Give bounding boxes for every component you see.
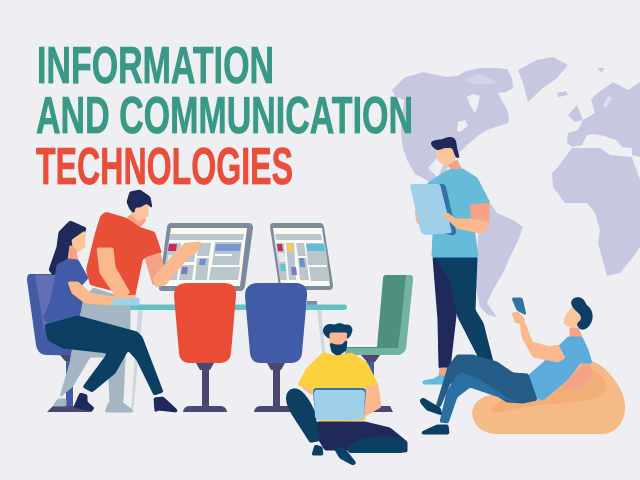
upper arm xyxy=(145,253,167,285)
face xyxy=(131,203,148,221)
front leg xyxy=(440,373,517,423)
face xyxy=(72,231,85,252)
left arm xyxy=(97,248,130,298)
reclining man on bean bag xyxy=(420,297,625,434)
heel left xyxy=(74,393,94,411)
man in red xyxy=(53,190,201,412)
hair xyxy=(49,221,86,275)
arms xyxy=(363,385,381,417)
monitor right xyxy=(270,223,333,290)
table leg right xyxy=(317,310,326,360)
arctic islet xyxy=(597,68,604,73)
table top xyxy=(113,304,347,310)
table xyxy=(113,301,347,412)
left trouser leg xyxy=(433,257,457,368)
eurasia xyxy=(567,82,640,157)
green chair xyxy=(345,275,413,412)
shoes xyxy=(420,398,442,415)
shoe xyxy=(423,375,446,384)
shirt xyxy=(86,212,162,297)
trousers xyxy=(60,288,130,402)
greenland xyxy=(518,57,568,102)
standing man xyxy=(410,137,493,384)
left hand xyxy=(415,210,423,225)
british isles xyxy=(568,105,583,122)
tablet spine xyxy=(439,184,456,235)
shirt xyxy=(420,169,490,257)
tablet xyxy=(410,184,452,235)
heel right xyxy=(154,397,177,412)
africa xyxy=(552,148,640,276)
beard xyxy=(330,340,347,356)
right leg xyxy=(347,436,407,453)
world map xyxy=(392,57,640,317)
hair xyxy=(431,137,460,158)
iceland xyxy=(557,91,568,97)
neck xyxy=(570,328,582,337)
forearm and pointing hand xyxy=(153,242,201,287)
blue chair xyxy=(245,283,307,412)
tablet xyxy=(112,298,139,305)
woman xyxy=(43,221,177,412)
man with laptop xyxy=(286,323,407,465)
trousers xyxy=(45,316,163,395)
shirt xyxy=(43,259,88,326)
shirt xyxy=(298,353,378,422)
shoes xyxy=(312,445,323,455)
back skin xyxy=(563,363,592,389)
face xyxy=(330,333,347,353)
sleeve arm xyxy=(470,203,489,227)
title xyxy=(36,37,413,196)
south america xyxy=(476,203,523,317)
torso xyxy=(529,337,592,400)
left leg xyxy=(286,388,320,443)
face xyxy=(564,307,582,328)
shoes xyxy=(105,402,133,412)
ankle xyxy=(439,368,449,378)
face xyxy=(436,148,458,166)
hair xyxy=(323,323,353,339)
bean bag shade xyxy=(490,368,606,412)
monitor left xyxy=(159,223,253,291)
red chair xyxy=(174,283,236,412)
neck xyxy=(68,245,78,262)
title line 1: INFORMATION xyxy=(37,37,274,95)
arm xyxy=(520,322,565,362)
title line 3: TECHNOLOGIES xyxy=(36,138,293,196)
laptop xyxy=(313,388,366,420)
neck xyxy=(448,160,462,172)
woman's chair xyxy=(27,274,108,412)
arm xyxy=(68,282,135,305)
hair xyxy=(571,297,593,330)
phone xyxy=(512,298,526,315)
neck xyxy=(127,212,146,227)
bean bag xyxy=(472,359,625,434)
north america xyxy=(392,68,513,210)
monitor stand xyxy=(307,301,317,305)
trousers xyxy=(313,422,407,452)
hand xyxy=(512,312,525,324)
title line 2: AND COMMUNICATION xyxy=(36,87,413,145)
forearm xyxy=(443,213,488,233)
right trouser leg xyxy=(435,257,493,362)
back leg xyxy=(436,355,537,407)
hair xyxy=(127,190,152,213)
table leg left xyxy=(131,310,143,412)
